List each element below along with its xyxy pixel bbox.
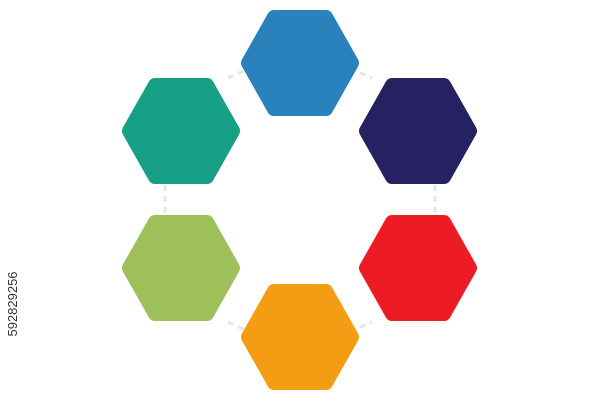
hexagon: bottom-left green [129,222,233,314]
hexagon: bottom-right red [366,222,470,314]
hexagon: top-right navy [366,85,470,177]
hexagon: top-left teal [129,85,233,177]
hexagon: bottom orange [248,291,352,383]
hexagon: top blue [248,17,352,109]
stock id text: 592829256 [5,271,20,337]
connector: dashed ring [165,68,435,332]
